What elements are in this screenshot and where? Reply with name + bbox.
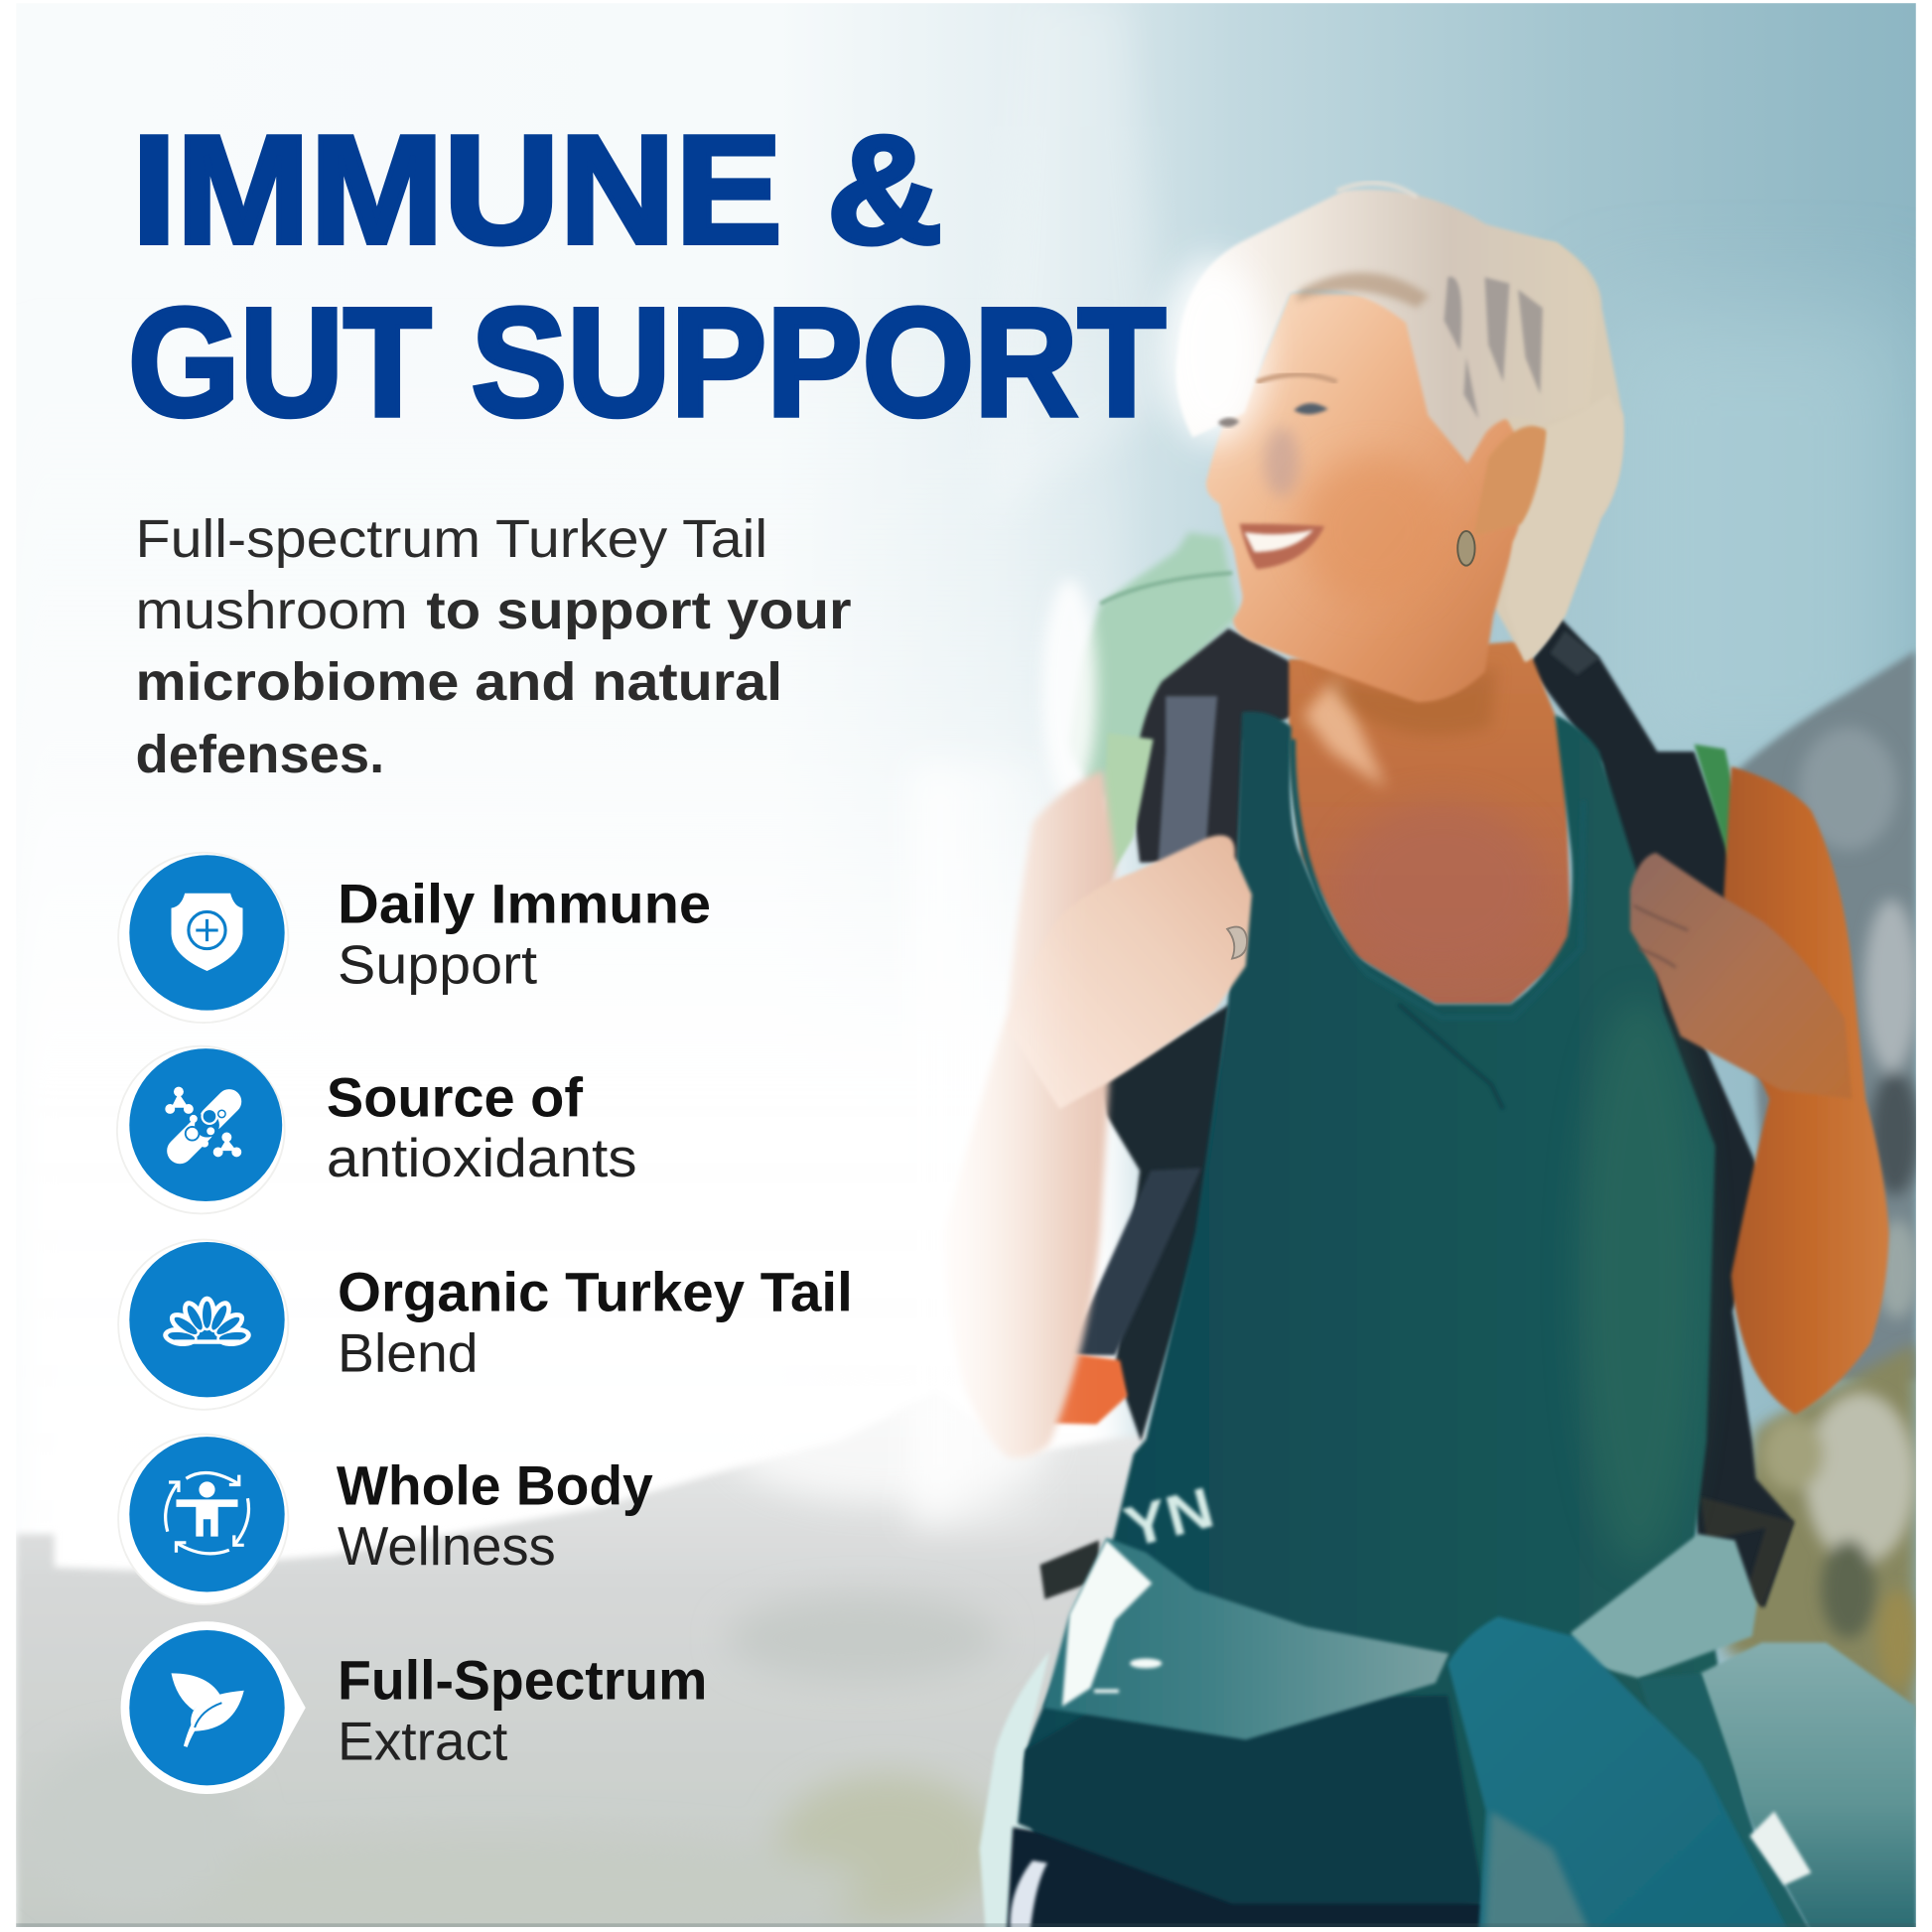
sleeve highlight <box>1749 1811 1811 1885</box>
badge circle <box>129 855 285 1011</box>
line 4: defenses. <box>136 726 384 784</box>
backpack green top <box>1069 532 1238 801</box>
backpack lower black section <box>1100 1004 1230 1442</box>
tank top <box>1011 712 1749 1932</box>
face <box>1206 293 1528 702</box>
badge circle <box>129 1630 285 1785</box>
badge ring <box>118 1240 288 1410</box>
side strap tab <box>1039 1540 1099 1599</box>
line 1: Full-spectrum Turkey Tail <box>136 510 767 569</box>
backpack dark body left <box>1131 628 1309 863</box>
mountain haze <box>745 1410 1033 1509</box>
neck and chest <box>1289 640 1571 1004</box>
lower strap <box>1067 1169 1201 1355</box>
distant mountain right <box>1737 650 1916 1380</box>
icon: shield <box>172 894 242 971</box>
hair wisp top <box>1337 183 1417 198</box>
label bold: Source of <box>327 1065 583 1128</box>
badge circle <box>129 1048 282 1201</box>
benefit: daily immune support <box>118 853 711 1023</box>
backpack green right <box>1692 743 1732 857</box>
nose side shadow <box>1264 428 1299 496</box>
chest shade <box>1337 801 1547 973</box>
tank neckline trim <box>1293 740 1584 1018</box>
backpack fold shadow <box>1100 573 1232 604</box>
right hand <box>1630 853 1852 1099</box>
tank right sheen <box>1578 998 1701 1565</box>
icon: leaves <box>172 1673 244 1747</box>
cheek shade <box>1300 456 1448 604</box>
title line 1: IMMUNE & <box>132 103 942 275</box>
orange buckle <box>1051 1351 1128 1425</box>
title <box>128 103 1166 448</box>
sleeve right <box>1701 1642 1916 1932</box>
badge circle <box>129 1242 285 1397</box>
badge ring with pointer <box>121 1621 306 1794</box>
label regular: Blend <box>338 1322 479 1383</box>
icon: capsule with molecules <box>165 1087 241 1157</box>
right mountain patches <box>1799 727 1920 1318</box>
backpack left halo <box>1042 579 1097 801</box>
neck light streak <box>1304 675 1386 788</box>
backpack grey strap <box>1159 696 1217 863</box>
icon: turkey tail mushroom <box>162 1297 252 1348</box>
knotted jacket left band <box>1043 1538 1449 1739</box>
foliage highlights <box>1762 1392 1917 1688</box>
label regular: antioxidants <box>327 1128 637 1188</box>
backpack strap buckle <box>1550 630 1599 675</box>
right arm <box>1719 766 1889 1415</box>
benefit: source of antioxidants <box>117 1046 637 1213</box>
left white fade <box>402 593 1138 1535</box>
hair lower flap <box>1506 394 1623 661</box>
sky <box>402 3 1916 1927</box>
label bold: Whole Body <box>337 1453 653 1516</box>
hair back <box>1392 221 1623 661</box>
backpack pale green side <box>1104 735 1156 874</box>
label regular: Extract <box>338 1711 507 1771</box>
label bold: Full-Spectrum <box>338 1648 707 1711</box>
badge circle <box>129 1437 285 1591</box>
tank fold line <box>1399 1004 1503 1109</box>
leggings <box>1007 1828 1484 1932</box>
hair top <box>1176 190 1596 464</box>
left arm <box>944 770 1115 1457</box>
benefit: organic turkey tail blend <box>118 1240 853 1410</box>
backpack strap right <box>1528 619 1794 1608</box>
eye near <box>1294 403 1328 414</box>
label regular: Wellness <box>338 1516 556 1577</box>
under-jaw shadow <box>1312 665 1497 736</box>
knotted jacket right band <box>1571 1534 1757 1678</box>
benefit: whole body wellness <box>118 1435 653 1604</box>
leggings highlight <box>1010 1861 1047 1932</box>
forehead glare <box>1162 259 1266 444</box>
distant mountain left <box>16 1436 1146 1927</box>
ear <box>1473 426 1548 536</box>
overexposure glow on left side of figure <box>911 763 1072 1528</box>
label regular: Support <box>338 934 537 995</box>
shirt print: YN <box>1118 1475 1220 1560</box>
eyebrow <box>1257 374 1337 382</box>
right hand finger creases <box>1634 905 1688 967</box>
label bold: Organic Turkey Tail <box>338 1260 853 1322</box>
eye far <box>1218 418 1240 427</box>
mountain shading patches <box>741 1598 985 1926</box>
benefit: full-spectrum extract <box>121 1621 707 1794</box>
pale sheer layer left hip <box>980 1651 1049 1932</box>
sash left pale edge <box>1484 1811 1589 1932</box>
hair brow shadow <box>1297 272 1430 308</box>
line 2 bold: to support your <box>426 582 852 640</box>
teeth <box>1244 530 1313 552</box>
icon: person with circular arrows <box>166 1473 249 1554</box>
lower right buckle strap <box>1701 1497 1794 1608</box>
badge ring <box>117 1046 285 1213</box>
left hand <box>1007 835 1252 1109</box>
mouth <box>1240 523 1324 569</box>
photo bottom edge <box>16 1923 1916 1927</box>
line 2 regular: mushroom <box>136 582 408 640</box>
label bold: Daily Immune <box>338 873 711 935</box>
foliage right <box>1725 1343 1916 1725</box>
badge ring <box>118 853 288 1023</box>
line 3: microbiome and natural <box>136 653 782 712</box>
band sunlight spots <box>1062 1540 1162 1707</box>
intro paragraph <box>136 510 852 784</box>
shirt lower dark <box>1018 1696 1484 1903</box>
badge ring <box>118 1435 288 1604</box>
earring <box>1457 531 1475 566</box>
left hand ring <box>1227 927 1247 959</box>
lower right sky <box>1632 306 1916 766</box>
sky light beam <box>1061 20 1150 431</box>
knot hanging sash <box>1448 1616 1789 1932</box>
sleeve dark under <box>1639 1673 1811 1932</box>
hair dark streaks <box>1445 277 1543 419</box>
title line 2: GUT SUPPORT <box>128 276 1166 448</box>
